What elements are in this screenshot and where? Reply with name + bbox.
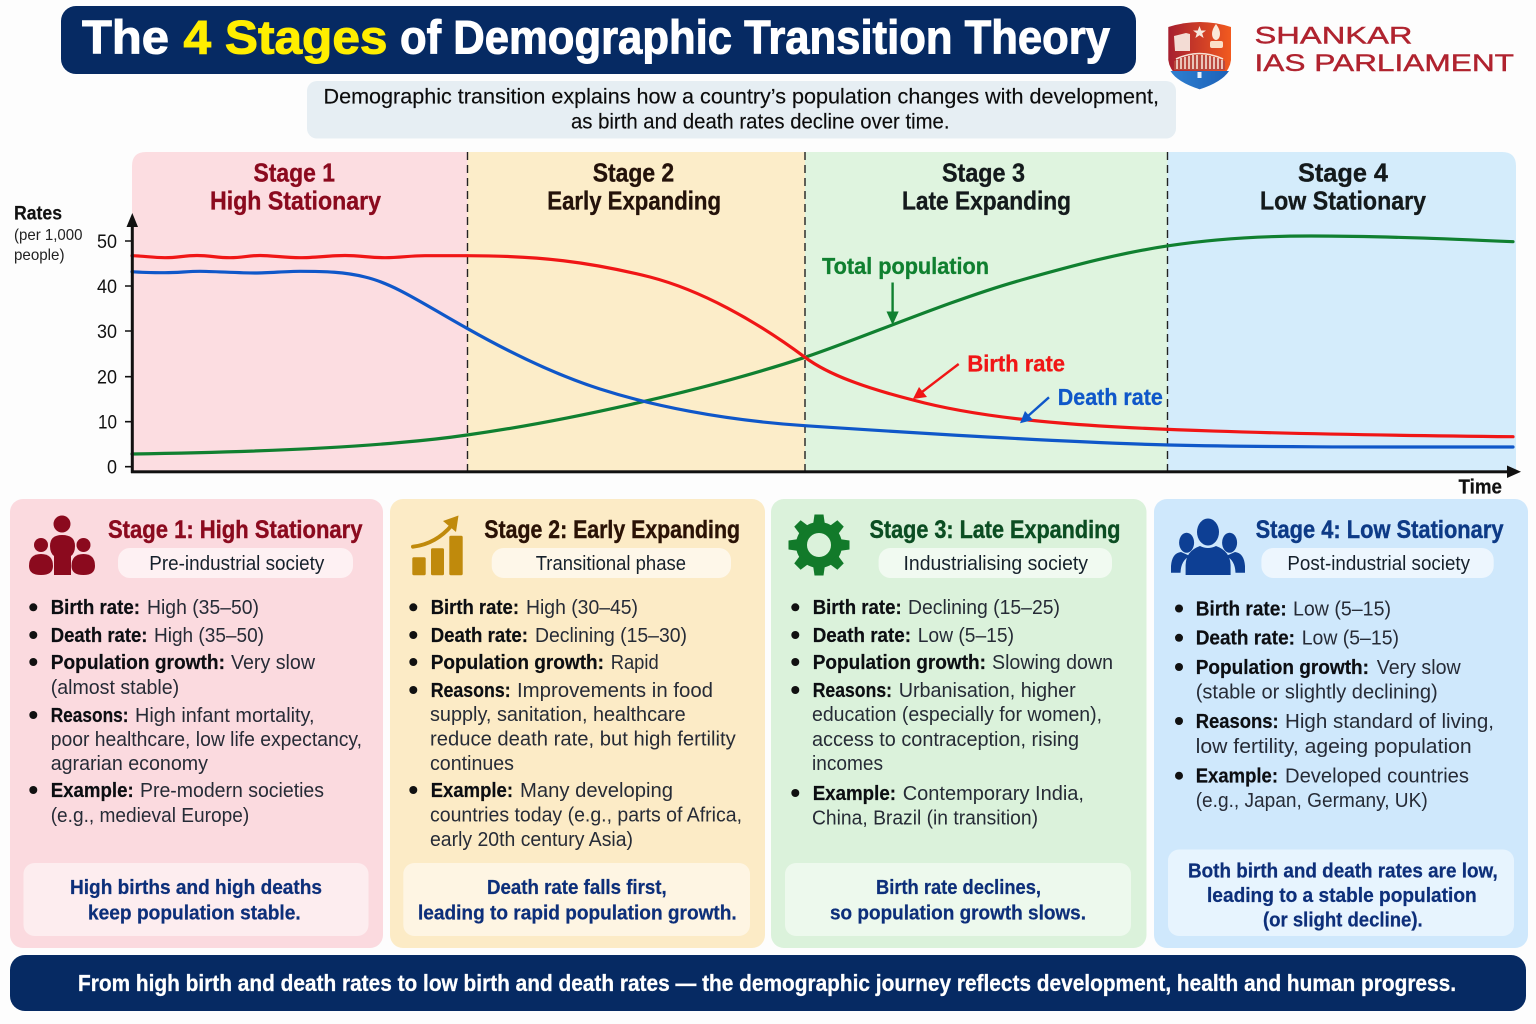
footer banner [10, 955, 1526, 1011]
label: Time: Time [1458, 476, 1502, 498]
bullet: example: Example: [813, 783, 896, 805]
bullet: example: Developed countries [1285, 766, 1469, 788]
panel: stage 4 [1154, 499, 1528, 948]
bullet: death rate: Low (5–15) [1302, 628, 1399, 650]
panel: stage 1 [10, 499, 383, 948]
title banner [61, 6, 1136, 74]
bullet: example: (e.g., medieval Europe) [51, 805, 249, 827]
bullet: reasons [791, 680, 1102, 775]
intro text box: as birth and death rates decline over time. [571, 110, 950, 134]
callout: Death rate falls first, [487, 876, 667, 899]
callout [785, 863, 1131, 936]
bullet: birth rate: Birth rate: [51, 597, 140, 619]
bullet: population growth [1175, 657, 1461, 704]
callout [403, 863, 750, 936]
bullet: death rate: High (35–50) [154, 625, 264, 647]
stage heading: stage 2: Early Expanding [547, 185, 721, 215]
panel heading: Stage 4: Low Stationary [1256, 516, 1504, 544]
title banner: 4 Stages [184, 10, 388, 64]
bullet: death rate: Low (5–15) [918, 625, 1014, 647]
bullet: population growth: Population growth: [1196, 657, 1369, 679]
bullet: death rate: Death rate: [1196, 628, 1295, 650]
icon: people group [29, 516, 95, 575]
callout: High births and high deaths [70, 876, 322, 899]
axis: time with arrow [131, 466, 1521, 478]
logo wordmark: SHANKAR [1254, 22, 1412, 49]
bullet: birth rate: High (30–45) [526, 597, 638, 619]
bullet: population growth [29, 652, 316, 699]
phase pill [879, 548, 1112, 578]
panel heading: Stage 1: High Stationary [108, 516, 363, 544]
bullet: reasons: supply, sanitation, healthcare [430, 704, 686, 726]
phase pill: Pre-industrial society [149, 553, 324, 575]
bullet: example [29, 780, 324, 827]
bullet: population growth: Slowing down [992, 652, 1113, 674]
label: birth rate: Birth rate [967, 351, 1065, 377]
title banner: of Demographic Transition Theory [400, 10, 1110, 64]
bullet: population growth: Population growth: [431, 652, 604, 674]
arrow: birth rate [913, 364, 959, 399]
bullet: example [1175, 766, 1469, 812]
label: death rate: Death rate [1058, 384, 1163, 410]
callout [1168, 850, 1514, 936]
icon: logo shield [1168, 22, 1231, 89]
bullet: reasons [409, 680, 736, 775]
stage band: stage 4 [1168, 152, 1516, 472]
icon: gear [788, 514, 850, 576]
stage heading: stage 4: Low Stationary [1260, 185, 1426, 215]
icon: rising bar chart [412, 516, 463, 575]
bullet: reasons: education (especially for women), [812, 704, 1102, 726]
bullet: reasons [1175, 711, 1494, 758]
bullet: birth rate: Low (5–15) [1293, 598, 1391, 620]
phase pill: Post-industrial society [1287, 553, 1470, 575]
bullet: population growth: (stable or slightly declining) [1196, 682, 1438, 704]
callout [24, 863, 368, 936]
axis: y with arrow [126, 213, 138, 473]
bullet: birth rate: Declining (15–25) [908, 597, 1060, 619]
bullet: birth rate: Birth rate: [1196, 598, 1287, 620]
label: total population: Total population [822, 253, 989, 279]
arrow: death rate [1020, 397, 1049, 423]
bullet: birth rate [1175, 598, 1391, 620]
bullet: reasons: reduce death rate, but high fertility [430, 729, 736, 751]
stage heading: stage 4: Stage 4 [1298, 158, 1389, 188]
line: birth rate [132, 256, 1513, 437]
bullet: reasons: agrarian economy [51, 753, 208, 775]
bullet: example: early 20th century Asia) [430, 829, 633, 851]
stage heading: stage 1: Stage 1 [254, 158, 335, 188]
bullet: death rate [409, 625, 687, 647]
bullet: death rate: Death rate: [813, 625, 911, 647]
bullet: example: Example: [431, 780, 513, 802]
stage heading: stage 3: Late Expanding [902, 185, 1071, 215]
panel heading: Stage 2: Early Expanding [484, 516, 740, 544]
stage heading: stage 1: High Stationary [210, 185, 381, 215]
bullet: birth rate: Birth rate: [431, 597, 519, 619]
panel: stage 3 [771, 499, 1146, 948]
bullet: example [409, 780, 742, 851]
y-axis labels: 20 [97, 366, 117, 388]
callout: keep population stable. [88, 901, 301, 924]
logo: Shankar IAS Parliament [1168, 22, 1514, 89]
stage band: stage 1 [132, 152, 468, 472]
bullet: birth rate [409, 597, 638, 619]
bullet: death rate: Death rate: [431, 625, 528, 647]
y-axis title: people) [14, 247, 64, 264]
bullet: population growth: Rapid [611, 652, 659, 674]
logo wordmark: IAS PARLIAMENT [1254, 50, 1514, 77]
bullet: example: Example: [51, 780, 134, 802]
stage band: stage 2 [468, 152, 805, 472]
bullet: reasons: High standard of living, [1285, 711, 1494, 733]
bullet: reasons [29, 705, 362, 775]
bullet: reasons: access to contraception, rising [812, 729, 1079, 751]
stage heading: stage 2 [547, 158, 721, 215]
y-axis title [14, 202, 83, 264]
bullet: birth rate: High (35–50) [147, 597, 259, 619]
bullet: death rate [791, 625, 1014, 647]
bullet: example: Contemporary India, [903, 783, 1084, 805]
line: total population [132, 236, 1513, 454]
logo wordmark [1254, 22, 1514, 77]
bullet: reasons: continues [430, 753, 514, 775]
panel: stage 2 [390, 499, 765, 948]
callout: so population growth slows. [830, 901, 1086, 924]
bullet: population growth: Population growth: [51, 652, 225, 674]
callout: Birth rate declines, [876, 876, 1041, 899]
bullet: birth rate [29, 597, 259, 619]
stage heading: stage 3: Stage 3 [942, 158, 1025, 188]
stage heading: stage 4 [1260, 158, 1426, 215]
bullet: population growth: Very slow [1377, 657, 1461, 679]
y-axis labels [97, 231, 117, 478]
bullet: reasons: poor healthcare, low life expectancy, [51, 729, 362, 751]
icon: people silhouettes [1171, 518, 1245, 575]
phase pill: Industrialising society [904, 553, 1088, 575]
bullet: population growth: Population growth: [813, 652, 986, 674]
bullet: reasons: Reasons: [813, 680, 892, 702]
bullet: birth rate [791, 597, 1060, 619]
y-axis labels: 0 [107, 456, 117, 478]
arrow: total population [886, 282, 899, 325]
title banner: The [82, 10, 169, 64]
stage heading: stage 1 [210, 158, 381, 215]
chart: demographic transition model [14, 152, 1521, 498]
bullet: reasons: low fertility, ageing population [1196, 736, 1472, 758]
phase pill [492, 548, 731, 578]
bullet: example: Many developing [520, 780, 673, 802]
y-axis title: Rates [14, 202, 62, 224]
bullet: reasons: incomes [812, 753, 883, 775]
bullet: population growth [791, 652, 1113, 674]
bullet: reasons: High infant mortality, [135, 705, 314, 727]
bullet: population growth: (almost stable) [51, 677, 179, 699]
bullet: reasons: Reasons: [51, 705, 129, 727]
stage heading: stage 3 [902, 158, 1071, 215]
bullet: death rate: Death rate: [51, 625, 148, 647]
y-axis labels: 30 [97, 321, 117, 343]
phase pill [118, 548, 353, 578]
callout: leading to a stable population [1207, 884, 1477, 907]
bullet: example [791, 783, 1084, 829]
bullet: example: Pre-modern societies [140, 780, 324, 802]
y-axis labels: 50 [97, 231, 117, 253]
bullet: example: countries today (e.g., parts of Africa, [430, 805, 742, 827]
phase pill: Transitional phase [536, 553, 686, 575]
bullet: death rate [29, 625, 264, 647]
bullet: reasons: Reasons: [1196, 711, 1279, 733]
bullet: example: (e.g., Japan, Germany, UK) [1196, 790, 1428, 812]
bullet: example: China, Brazil (in transition) [812, 807, 1038, 829]
bullet: death rate [1175, 628, 1399, 650]
callout: Both birth and death rates are low, [1188, 859, 1498, 882]
intro text box [307, 81, 1176, 138]
y-axis title: (per 1,000 [14, 227, 83, 244]
bullet: example: Example: [1196, 766, 1278, 788]
bullet: reasons: Improvements in food [517, 680, 713, 702]
y-axis labels: 40 [97, 276, 117, 298]
phase pill [1261, 548, 1494, 578]
intro text box: Demographic transition explains how a country’s population changes with development, [324, 84, 1159, 108]
panel heading: Stage 3: Late Expanding [870, 516, 1120, 544]
callout: leading to rapid population growth. [418, 901, 737, 924]
bullet: population growth: Very slow [231, 652, 316, 674]
callout: (or slight decline). [1263, 909, 1423, 932]
stage heading: stage 2: Stage 2 [593, 158, 674, 188]
stage band: stage 3 [805, 152, 1168, 472]
bullet: reasons: Urbanisation, higher [899, 680, 1076, 702]
bullet: reasons: Reasons: [431, 680, 511, 702]
line: death rate [132, 271, 1513, 447]
bullet: birth rate: Birth rate: [813, 597, 902, 619]
y-axis labels: 10 [98, 412, 117, 434]
bullet: death rate: Declining (15–30) [535, 625, 687, 647]
